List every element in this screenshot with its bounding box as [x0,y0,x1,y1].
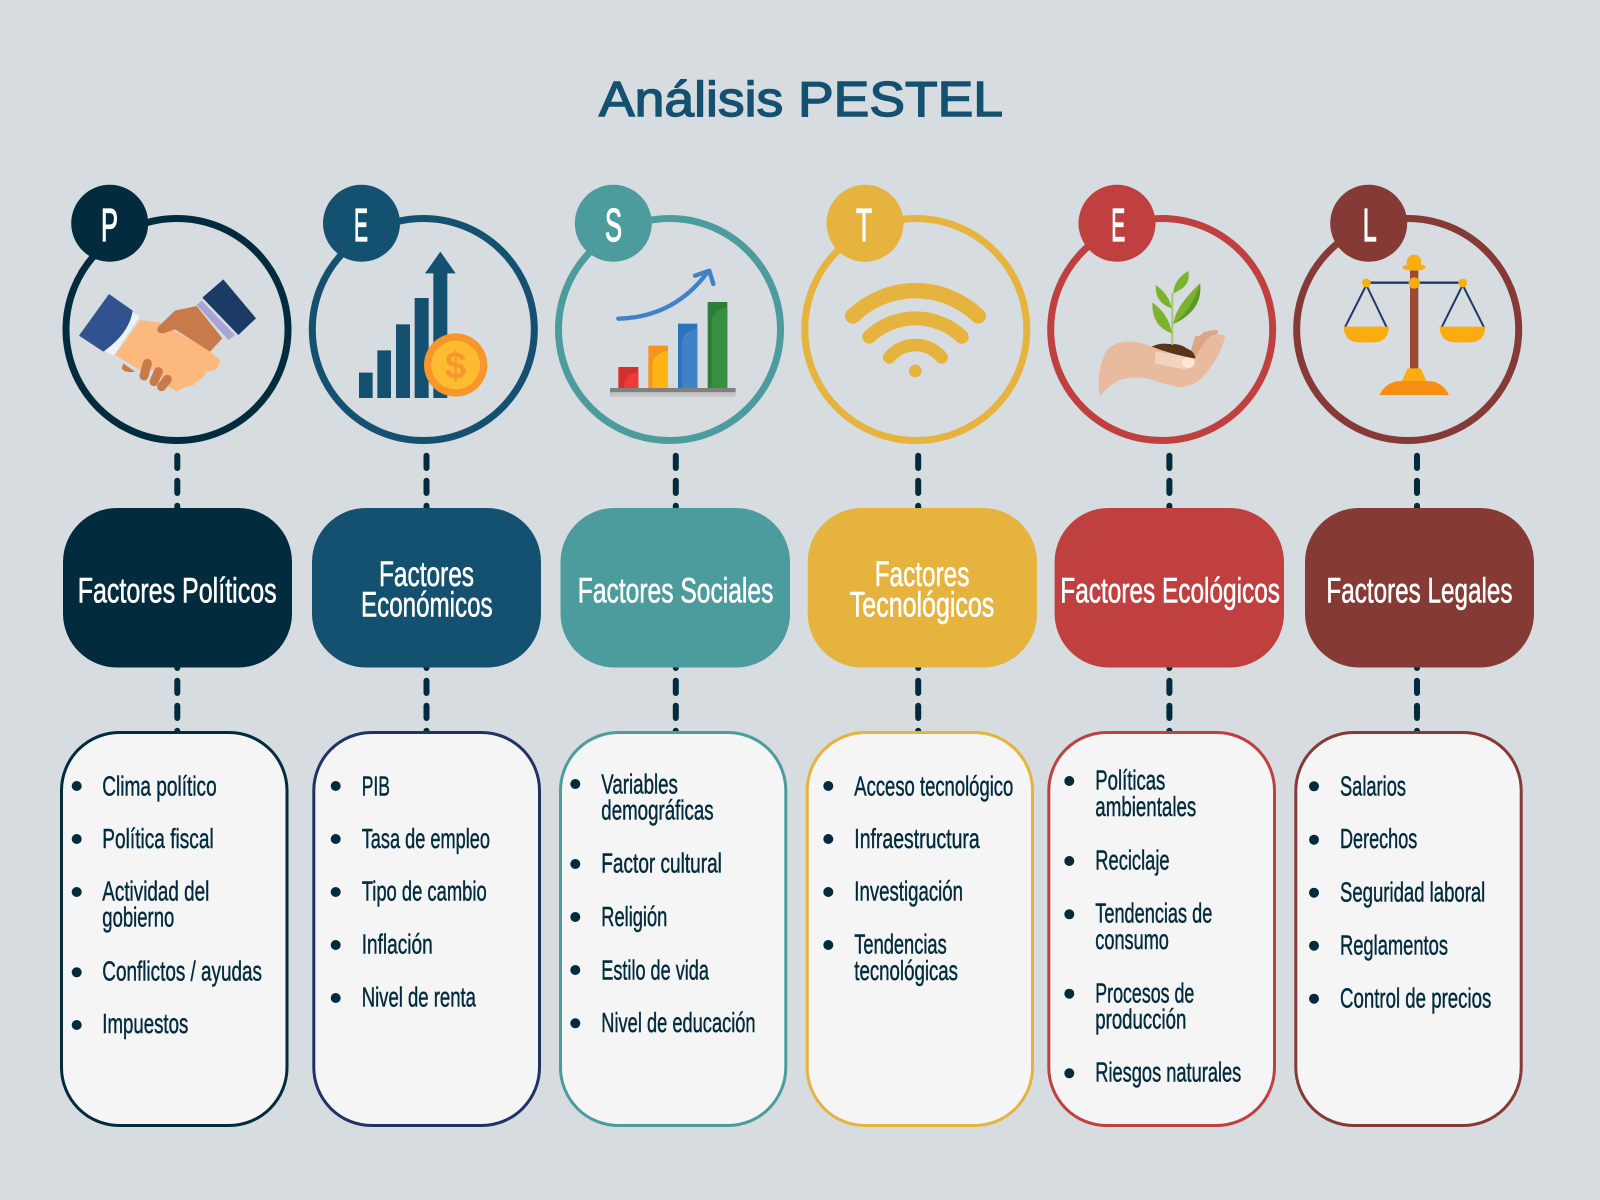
list panel: tecnológicos: Acceso tecnológico [854,770,1013,801]
list panel: legales: Control de precios [1340,983,1491,1014]
list panel: sociales: Estilo de vida [601,954,709,985]
ring: E [1051,218,1273,440]
header: Factores Tecnológicos: Factores [875,555,969,594]
list panel: legales: Seguridad laboral [1340,876,1485,907]
badge: T [826,185,904,262]
badge: L: L [1363,199,1377,251]
header: Factores Económicos: Factores [379,555,474,594]
list panel: tecnológicos: Tendencias [854,928,947,959]
list panel: tecnológicos: Investigación [854,875,963,906]
list panel: políticos: Conflictos / ayudas [102,955,262,986]
badge: T: T [856,199,872,251]
list panel: políticos: Política fiscal [102,823,214,854]
column: Factores Tecnológicos [805,185,1037,1126]
icon: scales of justice [1343,255,1485,395]
badge: P [71,185,148,262]
list panel: tecnológicos: Infraestructura [854,823,980,854]
icon: handshake [79,279,256,392]
header: Factores Legales [1305,508,1534,668]
list panel: sociales: Nivel de educación [601,1007,756,1038]
ring: E [312,218,534,440]
column: Factores Legales [1296,185,1534,1126]
list panel: ecológicos: producción [1095,1003,1186,1034]
list panel: sociales: Religión [601,901,667,932]
list panel: sociales: Factor cultural [601,848,722,879]
list panel: económicos: PIB [362,770,390,801]
badge: S: S [605,199,622,251]
title: Análisis PESTEL [599,73,1003,127]
header: Factores Ecológicos: Factores Ecológicos [1060,571,1280,610]
header: Factores Ecológicos [1055,508,1284,668]
header: Factores Legales: Factores Legales [1326,571,1512,610]
ring: S [558,218,780,440]
list panel: económicos: Tasa de empleo [362,823,490,854]
header: Factores Tecnológicos: Tecnológicos [850,586,994,625]
ring: P [66,218,288,440]
list panel: económicos: Inflación [362,929,433,960]
icon: plant in hand [1098,271,1225,397]
header: Factores Sociales: Factores Sociales [578,571,773,610]
list panel: ecológicos: consumo [1095,924,1169,955]
header: Factores Políticos: Factores Políticos [78,571,277,610]
list panel: políticos: Actividad del [102,875,209,906]
badge: L [1330,185,1407,262]
icon: growth chart with coin: $ [445,344,466,387]
list panel: económicos: Tipo de cambio [362,875,487,906]
list panel: sociales [560,732,786,1126]
column: Factores Políticos [62,185,292,1126]
list panel: ecológicos: Tendencias de [1095,898,1212,929]
list panel: políticos: Clima político [102,770,217,801]
list panel: políticos: gobierno [102,902,174,933]
list panel: ecológicos: Reciclaje [1095,844,1170,875]
header: Factores Tecnológicos [808,508,1037,668]
list panel: económicos: Nivel de renta [362,982,476,1013]
badge: P: P [101,199,118,251]
list panel: políticos: Impuestos [102,1008,188,1039]
list panel: ecológicos: ambientales [1095,791,1196,822]
list panel: legales: Reglamentos [1340,929,1448,960]
ring: T [805,218,1027,440]
icon: growth chart with coin [359,252,487,398]
icon: wifi [853,291,978,377]
list panel: sociales: Variables [601,768,678,799]
header: Factores Políticos [63,508,292,668]
badge: E [1078,185,1156,262]
list panel: legales: Salarios [1340,770,1406,801]
header: Factores Económicos: Económicos [361,586,493,625]
badge: E [323,185,400,262]
column: Factores Sociales [558,185,790,1126]
column: Factores Ecológicos [1049,185,1284,1126]
list panel: ecológicos: Procesos de [1095,977,1194,1008]
list panel: tecnológicos [807,732,1032,1126]
list panel: legales: Derechos [1340,823,1417,854]
ring: L [1297,218,1519,440]
badge: E: E [354,199,368,251]
icon: bar chart with arrow [610,271,736,397]
badge: S [575,185,652,262]
list panel: ecológicos: Políticas [1095,764,1165,795]
list panel: políticos [62,732,287,1126]
list panel: tecnológicos: tecnológicas [854,955,958,986]
header: Factores Sociales [560,508,790,668]
list panel: económicos [314,732,540,1126]
badge: E: E [1111,199,1125,251]
list panel: legales [1296,732,1521,1126]
list panel: ecológicos [1049,732,1274,1126]
column: Factores Económicos [312,185,541,1126]
header: Factores Económicos [312,508,541,668]
list panel: sociales: demográficas [601,794,714,825]
list panel: ecológicos: Riesgos naturales [1095,1057,1241,1088]
